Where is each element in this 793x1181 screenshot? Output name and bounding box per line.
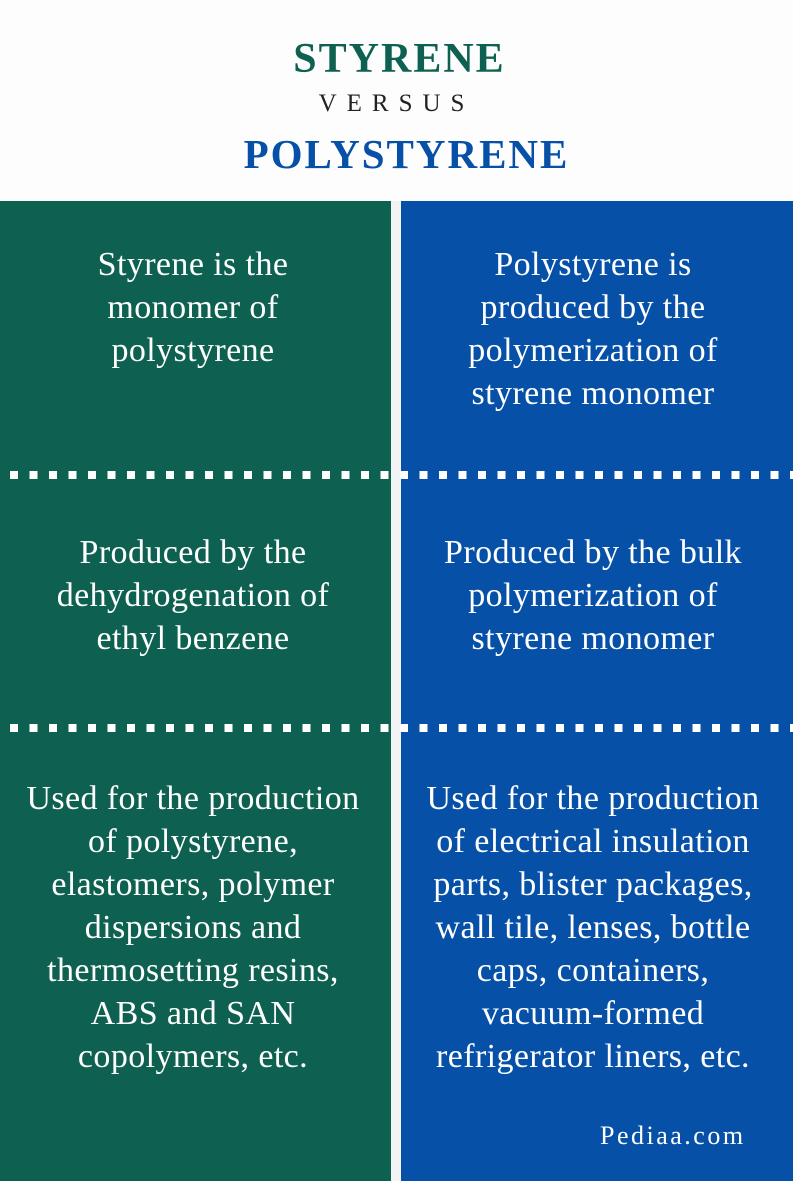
title: polystyrene: POLYSTYRENE <box>244 131 569 177</box>
title: styrene: STYRENE <box>293 36 506 82</box>
text: styrene uses: Used for the production <box>26 780 360 817</box>
logo: pediaa.com: Pediaa.com <box>600 1121 746 1150</box>
panel: styrene <box>0 201 391 1181</box>
text: polystyrene uses: wall tile, lenses, bottle <box>436 909 750 946</box>
panel: polystyrene <box>401 201 793 1181</box>
text: polystyrene uses: caps, containers, <box>477 952 709 989</box>
text: polystyrene definition: polymerization of <box>468 332 718 369</box>
text: polystyrene uses: of electrical insulation <box>436 823 750 860</box>
text: polystyrene uses: Used for the production <box>426 780 760 817</box>
text: styrene definition: Styrene is the <box>98 246 288 283</box>
text: polystyrene uses: vacuum-formed <box>482 995 704 1032</box>
title: versus: VERSUS <box>319 90 474 117</box>
text: styrene production: dehydrogenation of <box>57 577 329 614</box>
text: polystyrene production <box>444 534 742 657</box>
text: styrene production: ethyl benzene <box>96 620 290 657</box>
text: styrene uses <box>26 780 360 1075</box>
text: styrene uses: dispersions and <box>85 909 301 946</box>
separator row 1 <box>0 471 793 479</box>
text: polystyrene production: styrene monomer <box>472 620 714 657</box>
text: polystyrene production: polymerization of <box>468 577 718 614</box>
text: styrene definition <box>98 246 288 369</box>
text: styrene definition: monomer of <box>107 289 279 326</box>
text: polystyrene uses <box>426 780 760 1075</box>
text: polystyrene definition <box>468 246 718 412</box>
text: styrene uses: elastomers, polymer <box>51 866 335 903</box>
text: styrene uses: copolymers, etc. <box>78 1038 308 1075</box>
text: styrene production: Produced by the <box>80 534 306 571</box>
separator row 2 <box>0 724 793 732</box>
text: polystyrene definition: Polystyrene is <box>494 246 692 283</box>
text: styrene production <box>57 534 329 657</box>
text: polystyrene uses: parts, blister packages, <box>433 866 753 903</box>
text: polystyrene definition: produced by the <box>480 289 706 326</box>
text: polystyrene production: Produced by the bulk <box>444 534 742 571</box>
text: styrene definition: polystyrene <box>111 332 275 369</box>
text: styrene uses: ABS and SAN <box>91 995 295 1032</box>
header <box>0 0 793 201</box>
text: styrene uses: thermosetting resins, <box>47 952 339 989</box>
text: styrene uses: of polystyrene, <box>88 823 298 860</box>
text: polystyrene uses: refrigerator liners, etc. <box>436 1038 750 1075</box>
text: polystyrene definition: styrene monomer <box>472 375 714 412</box>
